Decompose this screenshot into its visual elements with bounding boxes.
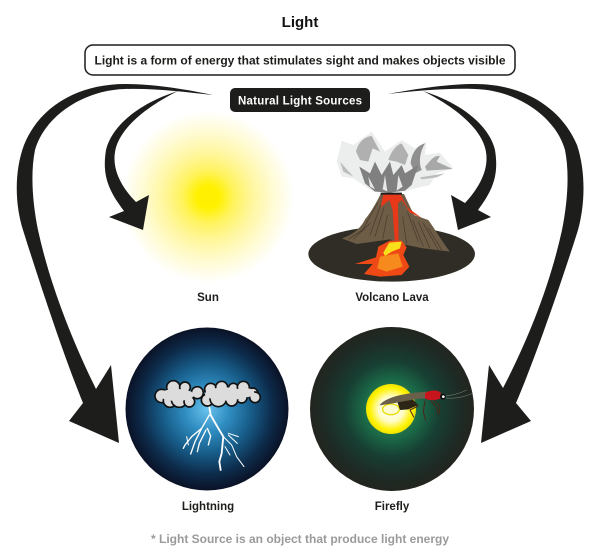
- arrow: to firefly: [388, 84, 584, 443]
- label: firefly: Firefly: [375, 501, 410, 513]
- glow: [366, 384, 416, 434]
- footnote: * Light Source is an object that produce light energy: [151, 532, 449, 546]
- clouds: [155, 381, 260, 407]
- label: volcano lava: Volcano Lava: [355, 292, 429, 304]
- thorax: [425, 390, 441, 400]
- antennae: [446, 390, 473, 398]
- night sky disc: [126, 328, 288, 490]
- firefly illustration: [310, 327, 474, 491]
- smoke: [337, 132, 453, 193]
- dark disc: [310, 327, 474, 491]
- wing: [379, 392, 427, 405]
- definition box: [85, 45, 515, 75]
- lava flow: [355, 241, 409, 277]
- lightning bolt: [183, 407, 244, 470]
- ground: [308, 226, 475, 282]
- arrow: to lightning: [17, 84, 213, 443]
- label: sun: Sun: [197, 292, 219, 304]
- arrow: to sun: [105, 91, 178, 230]
- abdomen: [397, 398, 418, 410]
- head and eye: [440, 394, 446, 400]
- title: Light: [282, 14, 318, 31]
- mountain: [342, 194, 450, 252]
- lightning illustration: [126, 328, 288, 490]
- label: lightning: Lightning: [182, 501, 234, 513]
- heading: natural light sources: [230, 88, 370, 112]
- light ring of abdomen: [383, 404, 399, 415]
- lava on the crater: [381, 195, 422, 241]
- sun: [122, 111, 294, 283]
- heading: natural light sources: Natural Light Sources: [238, 96, 362, 108]
- volcano illustration: [308, 132, 475, 282]
- arrow: to volcano: [423, 91, 496, 230]
- definition box: Light is a form of energy that stimulates sight and makes objects visible: [94, 54, 506, 68]
- legs: [410, 400, 440, 421]
